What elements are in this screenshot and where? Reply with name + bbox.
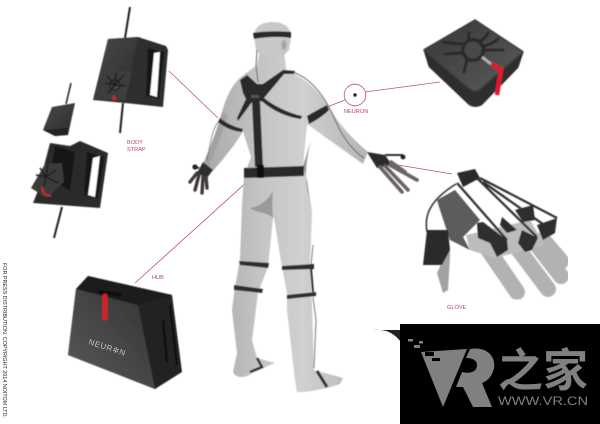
device: glove on hand <box>423 169 561 293</box>
logo R <box>456 349 494 407</box>
headband <box>253 31 291 39</box>
harness module <box>251 95 259 98</box>
hub logo text: NEUR✲N <box>87 337 127 358</box>
partially hidden device behind watermark <box>373 330 404 342</box>
callout lines <box>135 71 452 283</box>
icon: neuron callout circle <box>344 84 366 106</box>
wires <box>292 72 364 158</box>
label: glove: GLOVE <box>447 305 467 311</box>
device: neuron module small <box>43 83 75 136</box>
figure: body wearing motion capture suit <box>190 22 417 392</box>
label: neuron: NEURON <box>344 109 368 115</box>
finger clips <box>477 222 508 257</box>
glove palm <box>437 190 480 250</box>
device: neuron cube enlarged <box>424 20 523 106</box>
label: body strap: BODY <box>127 140 143 146</box>
glove rods <box>457 178 557 240</box>
left arm shading <box>203 112 228 167</box>
label: hub: HUB <box>152 275 164 281</box>
ear <box>282 40 286 50</box>
head <box>254 22 291 56</box>
waist belt <box>244 166 304 178</box>
arm bands <box>218 118 243 132</box>
logo url: WWW.VR.CN <box>498 396 588 408</box>
right hand <box>367 152 392 168</box>
harness straps <box>237 70 302 167</box>
logo V <box>421 349 467 407</box>
foot straps <box>250 358 262 372</box>
body silhouette <box>203 50 368 392</box>
copyright note: FOR PRESS DISTRIBUTION. COPYRIGHT 2014 NOITOM LTD. <box>1 263 7 418</box>
leg straps <box>239 261 269 268</box>
logo pixels <box>408 339 440 361</box>
device: open case with neuron <box>31 141 108 238</box>
device: body strap module closed <box>93 7 168 133</box>
left hand <box>197 162 213 178</box>
label: body strap: STRAP <box>127 147 146 153</box>
torso shading <box>250 140 312 218</box>
thumb piece <box>423 230 450 265</box>
device: hub <box>68 276 182 389</box>
logo chinese text: 之家 <box>498 345 588 396</box>
watermark: VR logo panel <box>400 324 600 424</box>
hand and fingers <box>487 240 561 292</box>
